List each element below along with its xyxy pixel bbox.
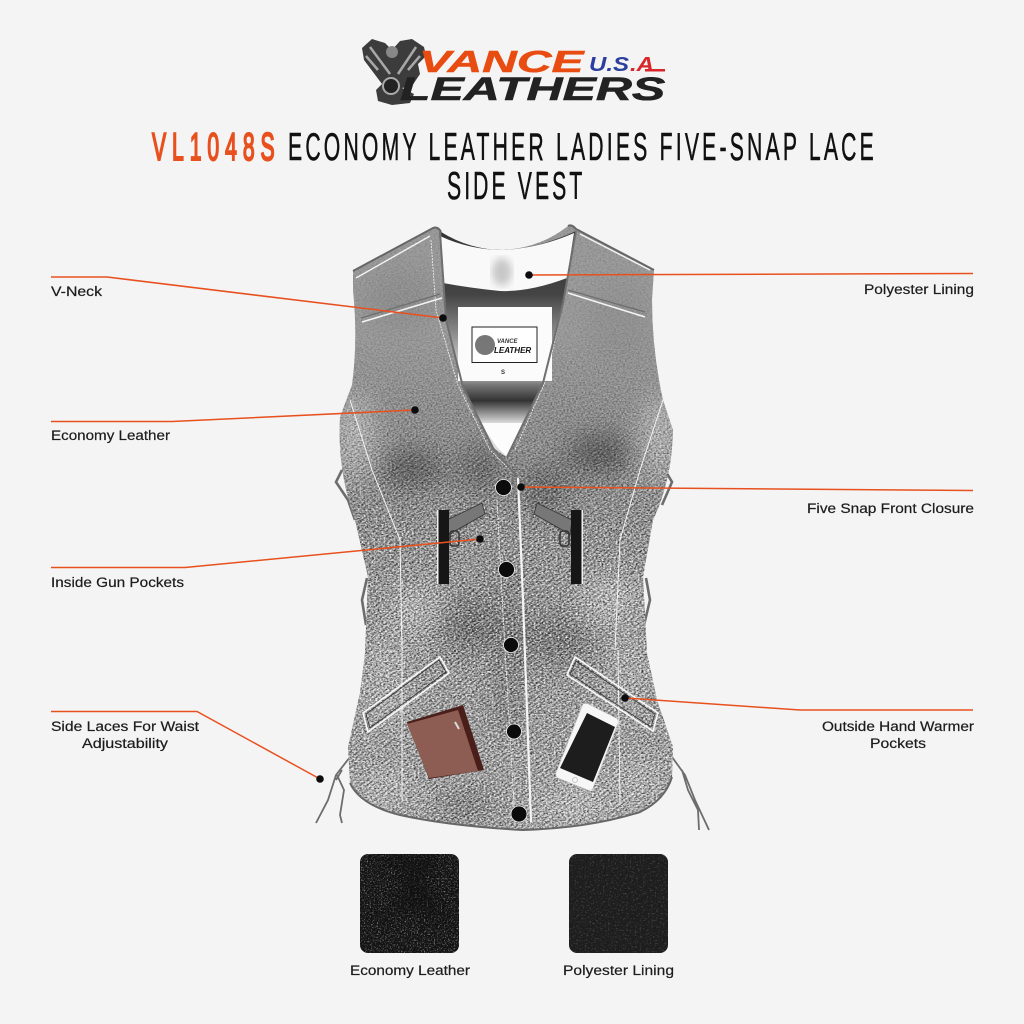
callout: Side Laces: Adjustability — [82, 736, 168, 751]
side laces — [316, 470, 709, 830]
callout: Side Laces — [51, 712, 324, 783]
logo word: VANCE: VANCE — [419, 44, 585, 79]
callout: Side Laces: Side Laces For Waist — [51, 719, 199, 734]
hand warmer pocket right — [567, 657, 658, 731]
callout: Outside Hand Warmer Pockets: Pockets — [870, 736, 926, 751]
callout: Inside Gun Pockets — [51, 535, 484, 590]
tag logo box — [472, 327, 537, 362]
tag size: S — [501, 370, 505, 376]
callout: Economy Leather — [51, 406, 419, 443]
logo word: U.S.A — [589, 53, 665, 76]
V-neck edge — [361, 231, 645, 477]
fine noise — [330, 220, 680, 835]
gun pocket right — [534, 503, 583, 584]
title line 1: ECONOMY LEATHER LADIES FIVE-SNAP LACE — [288, 125, 874, 169]
pistol slide — [447, 503, 485, 535]
callout: Inside Gun Pockets: Inside Gun Pockets — [51, 575, 184, 590]
callout: Outside Hand Warmer Pockets: Outside Hand Warmer — [822, 719, 975, 734]
collar shadow — [492, 258, 512, 286]
hand warmer pocket left — [363, 657, 449, 732]
brand logo — [362, 39, 665, 107]
leather shading — [339, 270, 674, 821]
swatch label: Economy Leather — [350, 963, 471, 978]
tag logo box: VANCE — [497, 339, 519, 345]
logo word: LEATHERS: LEATHERS — [400, 71, 665, 107]
swatch: polyester lining — [563, 854, 674, 978]
gun pocket left — [437, 503, 485, 584]
vest outline — [350, 225, 672, 830]
pocket opening — [437, 510, 449, 584]
inner lining — [441, 231, 576, 457]
pistol slide — [534, 503, 572, 535]
callout: Five Snap Front Closure — [517, 483, 974, 516]
callout: Polyester Lining: Polyester Lining — [864, 282, 974, 297]
callout: Outside Hand Warmer Pockets — [621, 694, 975, 751]
snap buttons — [496, 480, 527, 822]
neck tag — [458, 307, 552, 381]
swatch label: Polyester Lining — [563, 963, 674, 978]
callout: V-Neck — [51, 277, 447, 322]
phone — [556, 704, 618, 790]
vest product image — [316, 220, 709, 835]
logo word: U.S.A: .A — [630, 53, 654, 76]
pocket opening — [571, 510, 583, 584]
wallet — [407, 705, 484, 779]
white speckle — [340, 412, 673, 829]
vest body — [330, 220, 680, 835]
seams and stitching — [350, 234, 663, 822]
tag logo box: LEATHER — [494, 346, 531, 355]
swatch: economy leather — [350, 854, 471, 978]
diagonal grain — [340, 428, 673, 829]
callout: V-Neck: V-Neck — [51, 284, 102, 299]
callout: Five Snap Front Closure: Five Snap Front Closure — [807, 501, 974, 516]
title line 2: SIDE VEST — [447, 164, 582, 208]
lower white lining — [480, 423, 523, 457]
callout: Polyester Lining — [525, 271, 974, 297]
icon: engine emblem — [362, 39, 426, 105]
logo word: U.S.A: U.S — [589, 53, 629, 76]
title line 1: VL1048S — [152, 125, 275, 169]
collar lining — [440, 233, 574, 291]
title — [152, 125, 874, 208]
callout: Economy Leather: Economy Leather — [51, 428, 171, 443]
